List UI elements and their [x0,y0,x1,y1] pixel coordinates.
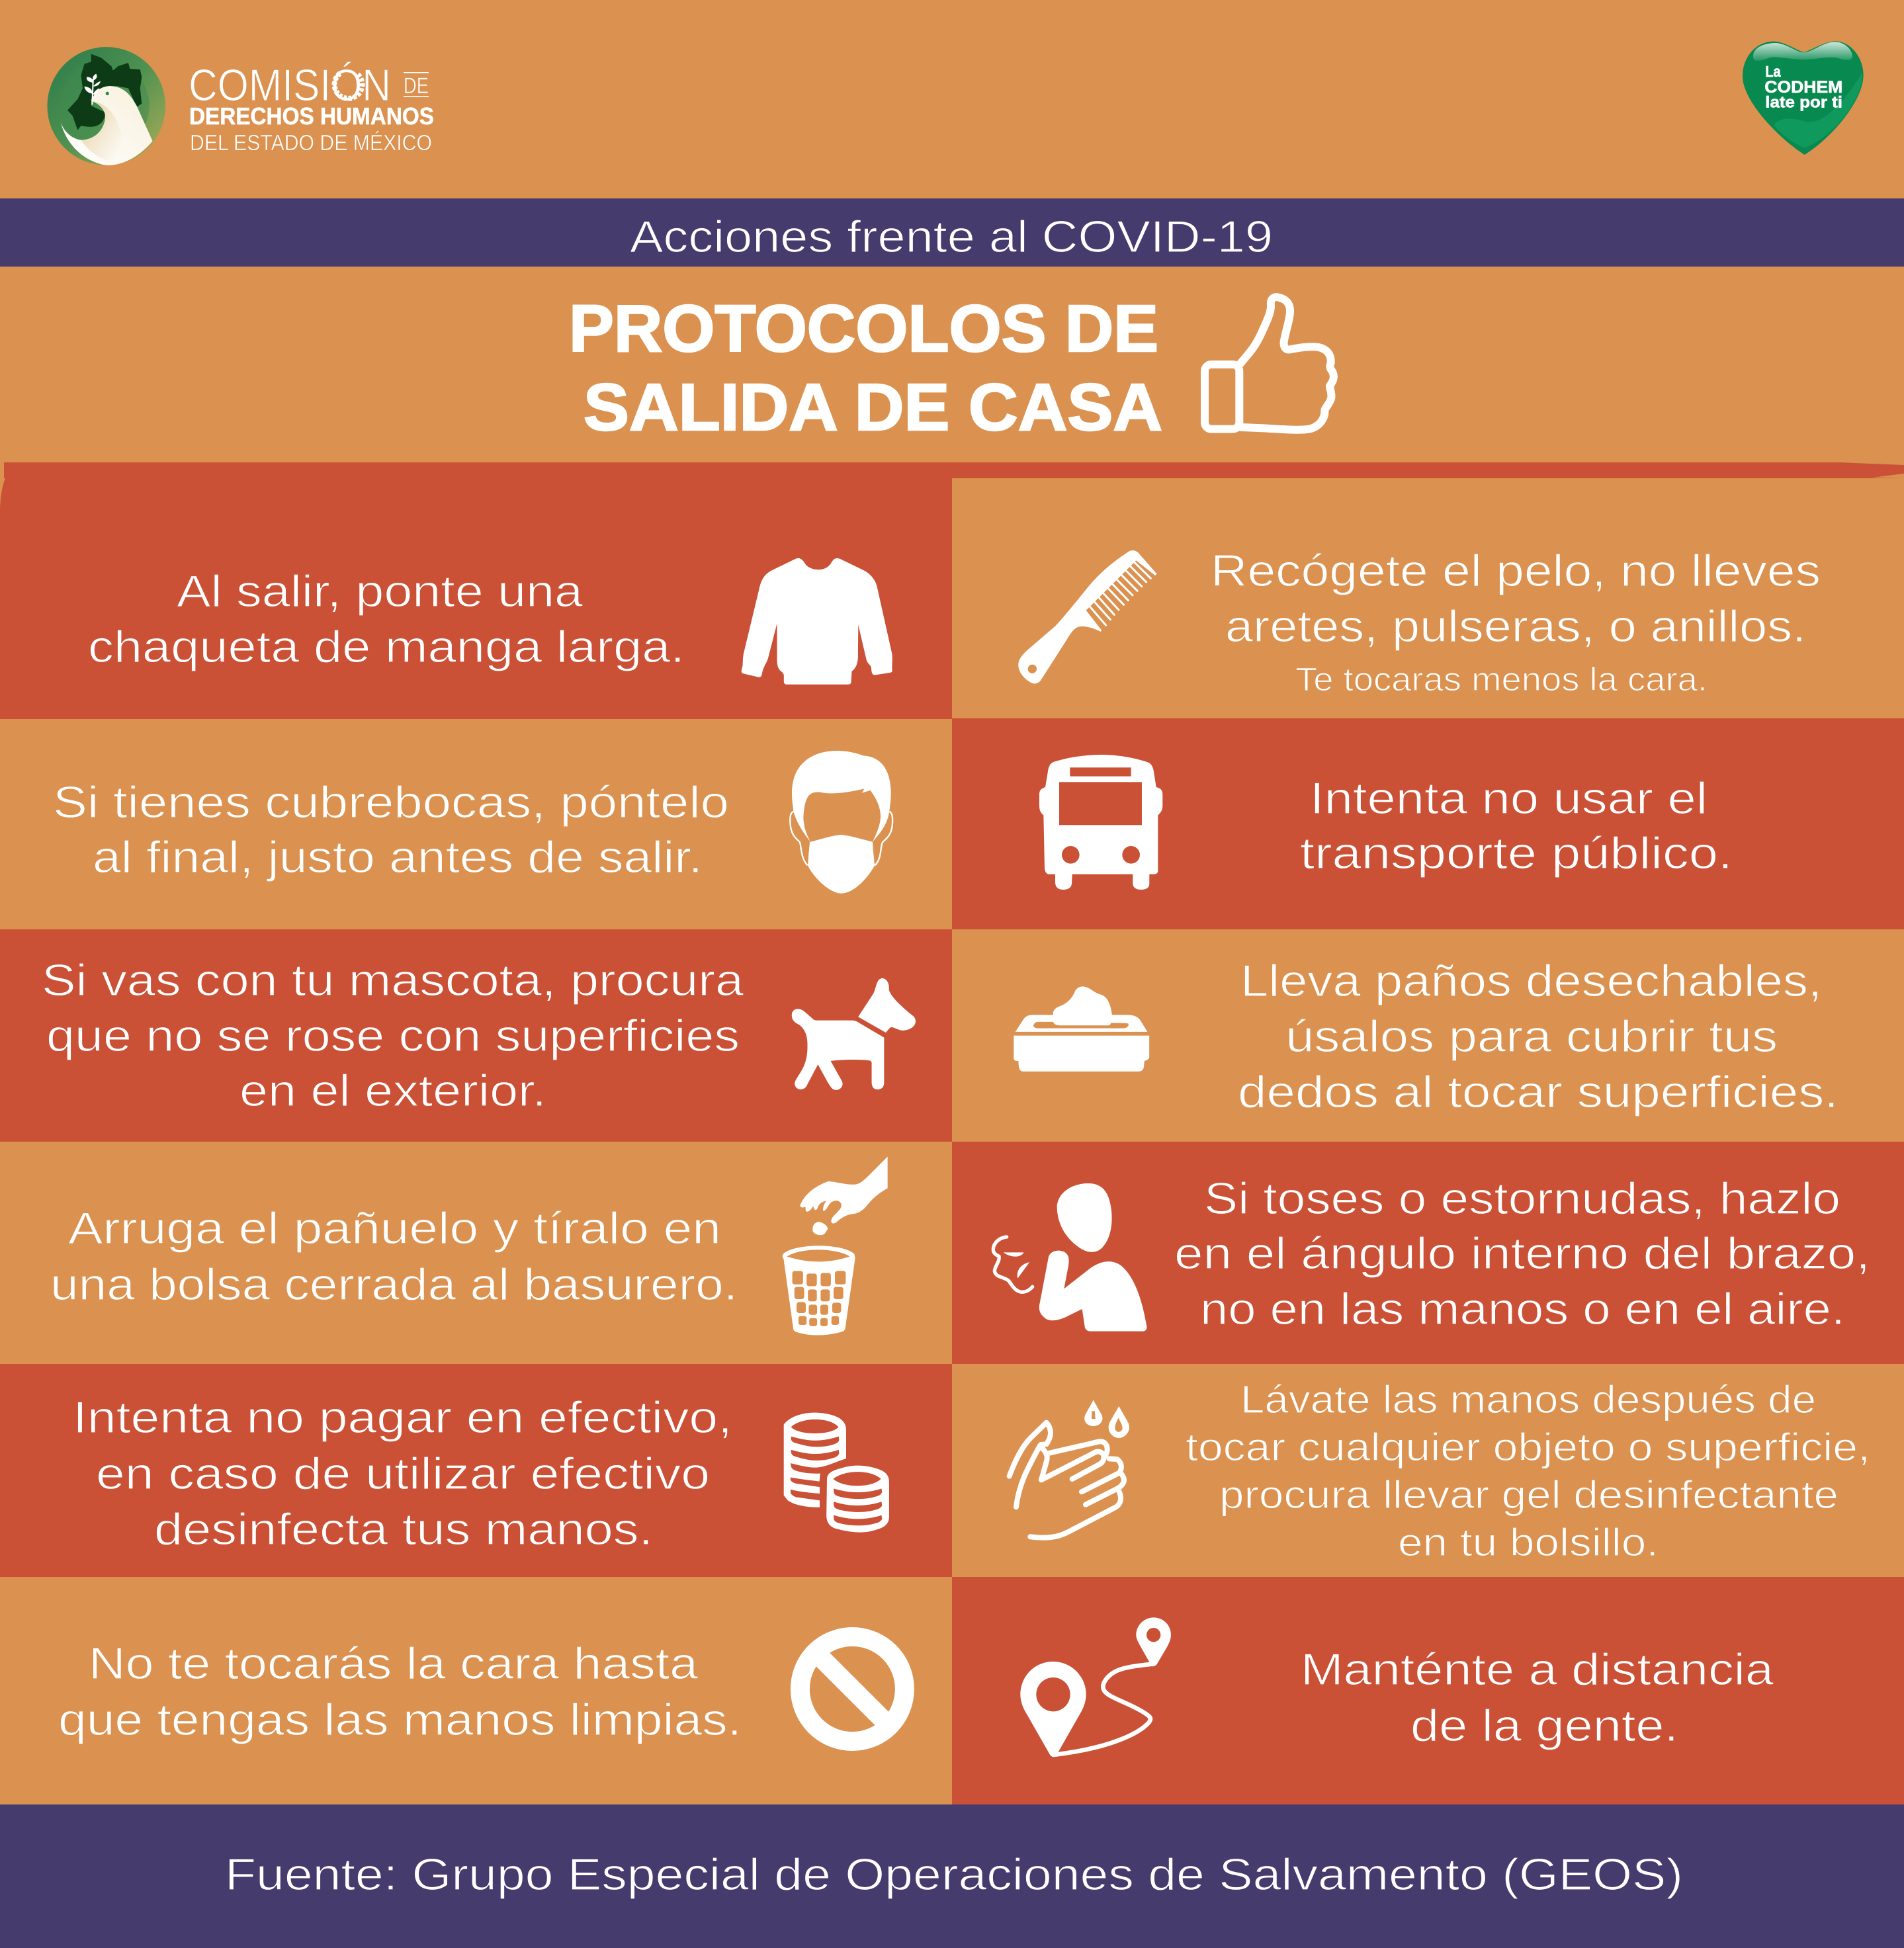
logo text: Comisión de Derechos Humanos: DEL ESTADO DE MÉXICO [190,130,432,155]
banner: Acciones frente al COVID-19 [0,198,1904,267]
text: transporte [1300,773,1733,878]
panel: pelo [952,478,1904,718]
icon: bus [1039,755,1162,890]
panel: toses [952,1142,1904,1364]
logo: CODHEM dove emblem [47,47,165,165]
logo: heart "La CODHEM late por ti": late por ti [1765,93,1842,111]
panel: paños [952,929,1904,1142]
logo: heart "La CODHEM late por ti" [1743,41,1864,155]
icon: comb [1018,550,1157,684]
icon: coin stacks [784,1413,889,1533]
logo text: Comisión de Derechos Humanos: DERECHOS HUMANOS [189,103,434,130]
text: efectivo: Intenta no pagar en efectivo, [73,1392,732,1443]
title: Protocolos de salida de casa [569,292,1162,445]
text: pelo: Te tocaras menos la cara. [1295,661,1708,698]
icon: hand and trash basket [783,1157,888,1335]
footer: fuente: Fuente: Grupo Especial de Operaciones de Salvamento (GEOS) [225,1849,1683,1900]
text: paños [1238,956,1839,1117]
text: efectivo: en caso de utilizar efectivo [96,1449,710,1499]
panel: chaqueta [0,478,952,719]
text: cubrebocas: Si tienes cubrebocas, póntelo [53,777,729,827]
text: lavado de manos: en tu bolsillo. [1398,1521,1659,1564]
logo text: Comisión de Derechos Humanos: DE [404,73,429,99]
panel: distancia [952,1577,1904,1804]
text: lavado de manos: tocar cualquier objeto o superficie, [1186,1425,1870,1469]
icon: face with mask [790,751,892,894]
icon: tissue box [1014,986,1149,1072]
icon: sweater [742,558,892,685]
text: no tocarse la cara: No te tocarás la cara hasta [89,1638,698,1689]
text: pelo: aretes, pulseras, o anillos. [1225,601,1806,652]
icon: prohibition sign [800,1636,904,1741]
logo: heart "La CODHEM late por ti": La [1765,63,1782,80]
text: pañuelo: una bolsa cerrada al basurero. [50,1259,738,1310]
text: distancia [1301,1644,1774,1751]
text: mascota [42,955,744,1116]
text: lavado de manos [1186,1378,1870,1564]
text: pelo: Recógete el pelo, no lleves [1211,546,1821,596]
text: mascota: en el exterior. [239,1066,546,1116]
icon: washing hands [1010,1400,1129,1538]
text: toses: Si toses o estornudas, hazlo [1204,1173,1840,1224]
text: pelo [1211,546,1821,698]
icon: person coughing [993,1183,1147,1332]
text: transporte: Intenta no usar el [1310,773,1708,824]
text: mascota: Si vas con tu mascota, procura [42,955,744,1005]
icon: dog [792,978,916,1090]
decorative red band [0,462,1904,478]
icon: thumbs up [1205,297,1334,430]
title: Protocolos de salida de casa: SALIDA DE CASA [584,370,1162,445]
panel: mascota [0,929,952,1142]
text: toses: no en las manos o en el aire. [1200,1284,1845,1334]
text: cubrebocas: al final, justo antes de salir. [93,832,703,882]
text: chaqueta: Al salir, ponte una [177,566,583,616]
text: lavado de manos: Lávate las manos después de [1240,1378,1816,1421]
footer: fuente [0,1804,1904,1948]
panel: transporte [952,718,1904,929]
text: pañuelo: Arruga el pañuelo y tíralo en [68,1203,721,1253]
text: distancia: Manténte a distancia [1301,1644,1774,1695]
banner: Acciones frente al COVID-19: Acciones frente al COVID-19 [630,212,1273,262]
logo text: Comisión de Derechos Humanos [189,60,434,155]
logo text: Comisión de Derechos Humanos: COMISIÓN [189,60,391,110]
text: paños: Lleva paños desechables, [1240,956,1822,1006]
text: mascota: que no se rose con superficies [46,1011,740,1061]
text: cubrebocas [53,777,729,882]
text: efectivo [73,1392,732,1554]
text: toses [1174,1173,1870,1334]
text: paños: dedos al tocar superficies. [1238,1067,1839,1117]
text: chaqueta [88,566,685,672]
text: toses: en el ángulo interno del brazo, [1174,1228,1870,1279]
text: paños: úsalos para cubrir tus [1285,1011,1778,1062]
logo: heart "La CODHEM late por ti": CODHEM [1764,78,1842,97]
panel: cubrebocas [0,719,952,929]
text: transporte: transporte público. [1300,828,1733,878]
panel: efectivo [0,1364,952,1577]
text: chaqueta: chaqueta de manga larga. [88,622,685,672]
panel: lavado de manos [952,1364,1904,1577]
title: Protocolos de salida de casa: PROTOCOLOS DE [569,292,1158,366]
icon: map pins with route [1020,1617,1171,1757]
text: lavado de manos: procura llevar gel desinfectante [1219,1473,1839,1517]
text: distancia: de la gente. [1410,1701,1678,1751]
text: no tocarse la cara [58,1638,742,1745]
text: no tocarse la cara: que tengas las manos limpias. [58,1695,742,1745]
panel: no tocarse la cara [0,1577,952,1804]
text: efectivo: desinfecta tus manos. [154,1504,653,1554]
text: pañuelo [50,1203,738,1310]
panel: pañuelo [0,1142,952,1364]
